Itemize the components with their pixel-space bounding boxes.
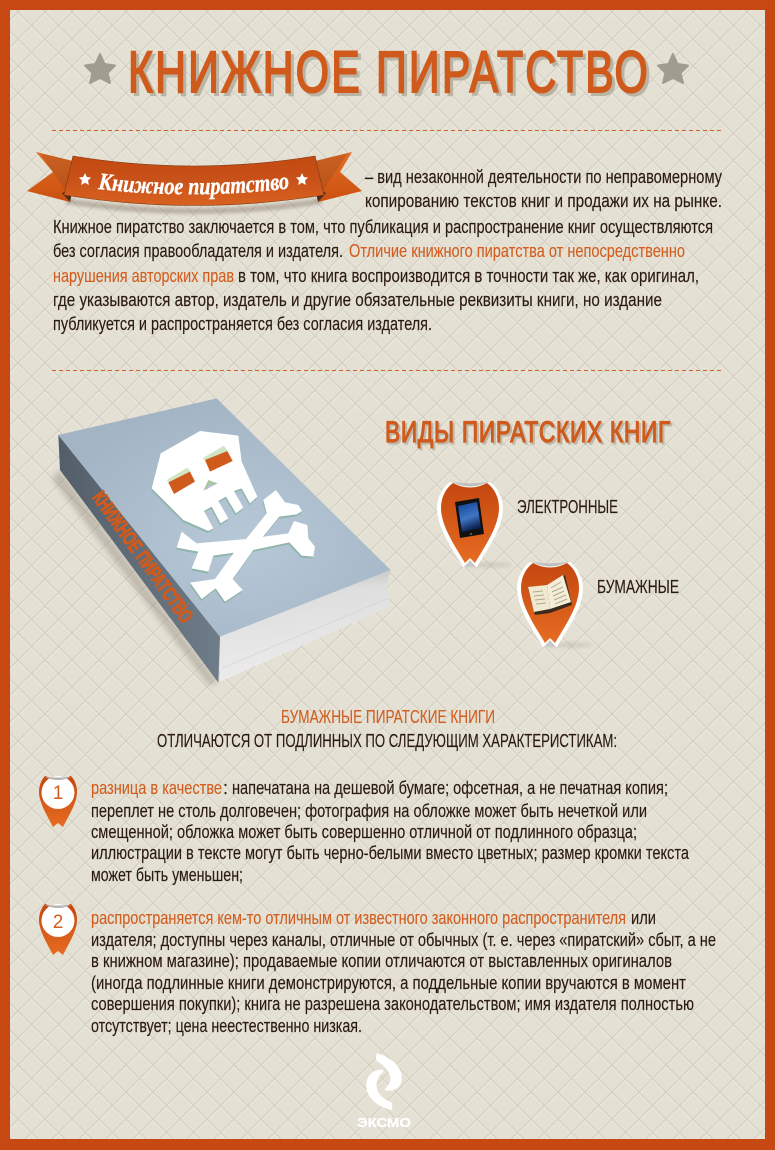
list item 1: : [223, 778, 228, 798]
subheading: БУМАЖНЫЕ ПИРАТСКИЕ КНИГИ [281, 707, 495, 727]
book illustration [52, 398, 391, 685]
list item 1: переплет не столь долговечен; фотография на обложке может быть нечеткой или [91, 801, 647, 821]
icon: left star [85, 54, 115, 83]
intro paragraph: копированию текстов книг и продажи их на рынке. [365, 191, 722, 211]
list item 2: или [631, 908, 656, 928]
ribbon stars [79, 173, 91, 185]
heading: types of pirate books: ВИДЫ ПИРАТСКИХ КНИГ [387, 418, 673, 451]
label: paper: БУМАЖНЫЕ [597, 577, 679, 597]
logo: Eksmo: ЭКСМО [357, 1115, 411, 1130]
icon: smartphone [455, 498, 484, 538]
list item 1: может быть уменьшен; [91, 865, 243, 885]
icon: open book [528, 575, 572, 615]
book cover [58, 398, 391, 637]
numbered pin 2: 2 [53, 912, 63, 933]
numbered pin 1: 1 [53, 783, 63, 804]
list item 1: смещенной; обложка может быть совершенно отличной от подлинного образца; [91, 822, 637, 842]
spine title: КНИЖНОЕ ПИРАТСТВО [88, 487, 197, 627]
intro paragraph: публикуется и распространяется без согласия издателя. [53, 314, 432, 334]
ribbon label: Книжное пиратство [98, 173, 288, 200]
list item 1: разница в качестве [91, 778, 222, 798]
list item 1: напечатана на дешевой бумаге; офсетная, а не печатная копия; [232, 778, 668, 798]
list item 2: в книжном магазине); продаваемые копии отличаются от выставленных оригиналов [91, 951, 672, 971]
icon: right star [658, 54, 688, 83]
book spine [58, 435, 220, 683]
label: electronic: ЭЛЕКТРОННЫЕ [517, 497, 618, 517]
intro paragraph: нарушения авторских прав [53, 266, 234, 286]
pin: electronic books [437, 482, 512, 568]
numbered pin 2 [39, 904, 77, 955]
intro paragraph [53, 167, 722, 334]
subheading [157, 707, 617, 751]
logo: Eksmo [357, 1055, 411, 1130]
intro paragraph: где указываются автор, издатель и другие обязательные реквизиты книги, но издание [53, 290, 662, 310]
heading: types of pirate books: ВИДЫ ПИРАТСКИХ КНИГ [385, 416, 671, 449]
list item 2: распространяется кем-то отличным от известного законного распространителя [91, 908, 626, 928]
book pages [220, 570, 391, 682]
subheading: ОТЛИЧАЮТСЯ ОТ ПОДЛИННЫХ ПО СЛЕДУЮЩИМ ХАРАКТЕРИСТИКАМ: [157, 731, 617, 751]
list item 1 [91, 778, 690, 885]
numbered pin 1 [39, 776, 77, 827]
skull and crossbones [151, 431, 315, 604]
pin: paper books [517, 562, 592, 648]
ribbon banner [27, 152, 362, 216]
intro paragraph: Отличие книжного пиратства от непосредственно [349, 241, 685, 261]
intro paragraph: без согласия правообладателя и издателя. [53, 241, 343, 261]
list item 2: отсутствует; цена неестественно низкая. [91, 1016, 362, 1036]
list item 2 [91, 908, 716, 1036]
